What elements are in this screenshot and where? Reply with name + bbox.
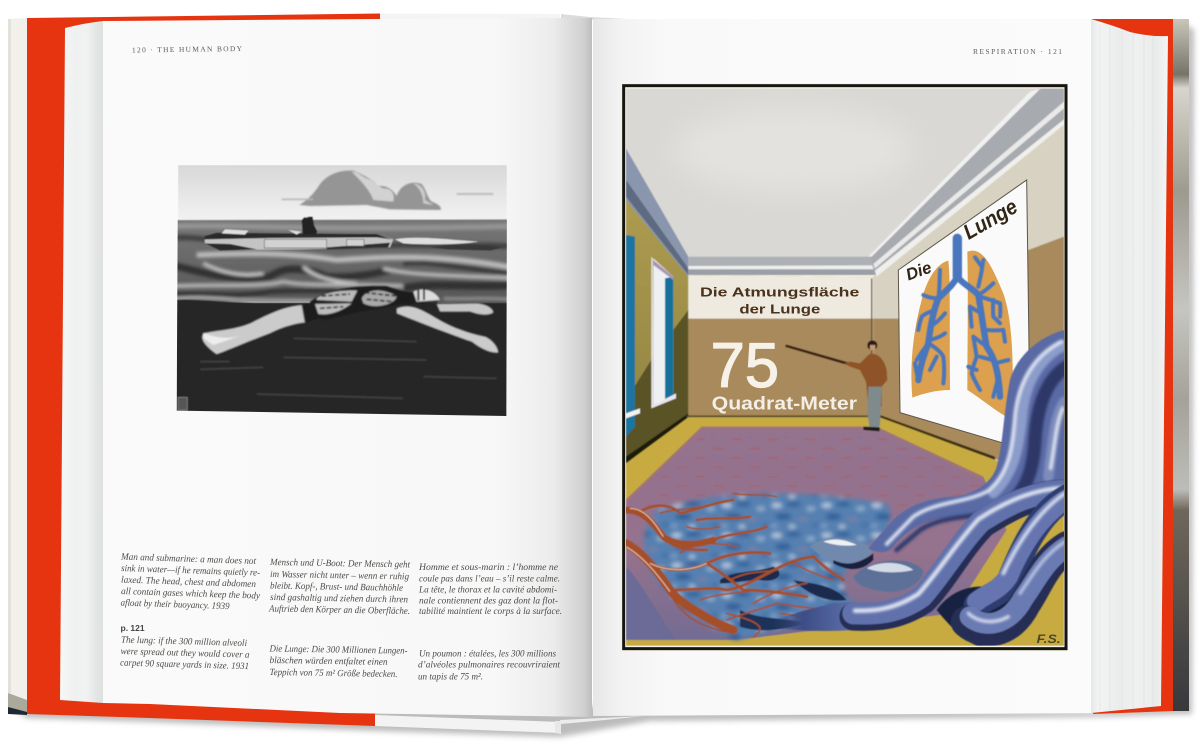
caption: English: Man and submarine: a man does not [120,551,257,567]
caption: German: Auftrieb den Körper an die Oberfläche. [268,603,410,617]
tube upper arch [868,330,1067,552]
caption: lung French: un tapis de 75 m². [418,672,483,682]
capillary patches [626,493,923,640]
caption: French: coule pas dans l’eau – s’il reste calme. [419,574,560,584]
caption: English: laxed. The head, chest and abdomen [121,575,256,590]
caption: French [418,562,562,617]
sea surface [170,219,517,303]
red cover right [1090,19,1173,714]
caption: lung English: The lung: if the 300 million alveoli [121,635,247,649]
left page block [60,18,592,717]
floor [626,417,1064,647]
poster titles [903,194,1022,284]
caption: lung French: d’alvéoles pulmonaires recouvriraient [418,660,560,670]
wall text [700,285,859,413]
wall text: 75 [711,331,779,401]
caption: German: im Wasser nicht unter – wenn er ruhig [270,569,409,582]
caption: lung German [269,643,408,680]
caption: lung English: carpet 90 square yards in size. 1931 [120,658,249,672]
ceiling [626,88,1040,257]
signature: F.S. [1037,632,1061,646]
tube lower loop [937,493,1068,647]
white wrapped cover centre [380,14,560,19]
caption: lung French: Un poumon : étalées, les 300 millions [419,648,556,660]
frame [621,83,1068,651]
right page block [593,19,1168,716]
caption: lung English [120,635,250,672]
carpet speckles [640,433,983,513]
arteries [626,493,847,637]
right wall [873,123,1064,490]
wall text: Quadrat-Meter [712,392,857,413]
caption: English: afloat by their buoyancy. 1939 [120,598,230,612]
spine edge left [8,18,27,714]
caption: French: tabilité maintient le corps à la surface. [419,606,562,617]
right page [593,19,1092,716]
person with pointer [787,340,887,431]
left page [103,18,592,717]
bronchial tree [915,238,1008,397]
back wall frieze [688,275,873,319]
poster titles: Lunge [959,194,1022,244]
caption: English: sink in water—if he remains quietly re- [121,563,260,579]
window far [626,235,676,437]
floating man [202,286,498,354]
illustration: man and submarine [163,165,517,423]
page edges left [60,21,103,703]
poster titles: Die [903,258,934,284]
submarine [204,217,393,251]
clouds [282,170,493,210]
left cornice [626,148,688,277]
caption: German: Mensch und U-Boot: Der Mensch geht [269,557,410,570]
caption: German: sind gashaltig und ziehen durch ihren [270,592,408,605]
caption: English: all contain gases which keep the body [121,586,261,602]
caption: lung French [418,648,560,682]
right cornice [870,88,1064,275]
running head right: RESPIRATION · 121 [973,47,1062,56]
caption: lung English: were spread out they would cover a [120,646,250,661]
running head left: 120 · THE HUMAN BODY [132,44,243,54]
caption: French: La tête, le thorax et la cavité abdomi- [418,584,557,596]
monogram [178,397,187,410]
caption: German [268,557,410,617]
lung lobes [911,261,950,398]
poster sheet [898,180,1029,451]
back wall [688,275,873,417]
tube middle long [770,488,1068,631]
back cornice [688,257,875,275]
caption: lung German: bläschen würden entfaltet einen [269,655,388,668]
black frame border [624,86,1066,649]
caption: lung German: Die Lunge: Die 300 Millionen Lungen- [269,643,408,657]
wall text: der Lunge [739,302,820,317]
poster: Die Lunge [898,180,1029,451]
red cover left [27,14,380,726]
sky [178,165,507,220]
page edges right [1091,19,1168,713]
caption: lung German: Teppich von 75 m² Größe bedecken. [269,667,398,680]
background strip right [1173,19,1189,711]
wall text: Die Atmungsfläche [700,285,859,300]
caption: page 121 reference: p. 121 [120,623,145,633]
left wall [626,198,688,463]
illustration: lung surface room [621,83,1068,651]
carpet [626,427,1007,640]
deep water [170,300,517,423]
caption: German: bleibt. Kopf-, Brust- und Bauchhöhle [270,581,404,594]
caption: French: Homme et sous-marin : l’homme ne [418,562,559,573]
caption: English [120,551,261,612]
alveoli tubes [624,86,1068,649]
caption: French: nale contiennent des gaz dont la flot- [419,596,558,606]
